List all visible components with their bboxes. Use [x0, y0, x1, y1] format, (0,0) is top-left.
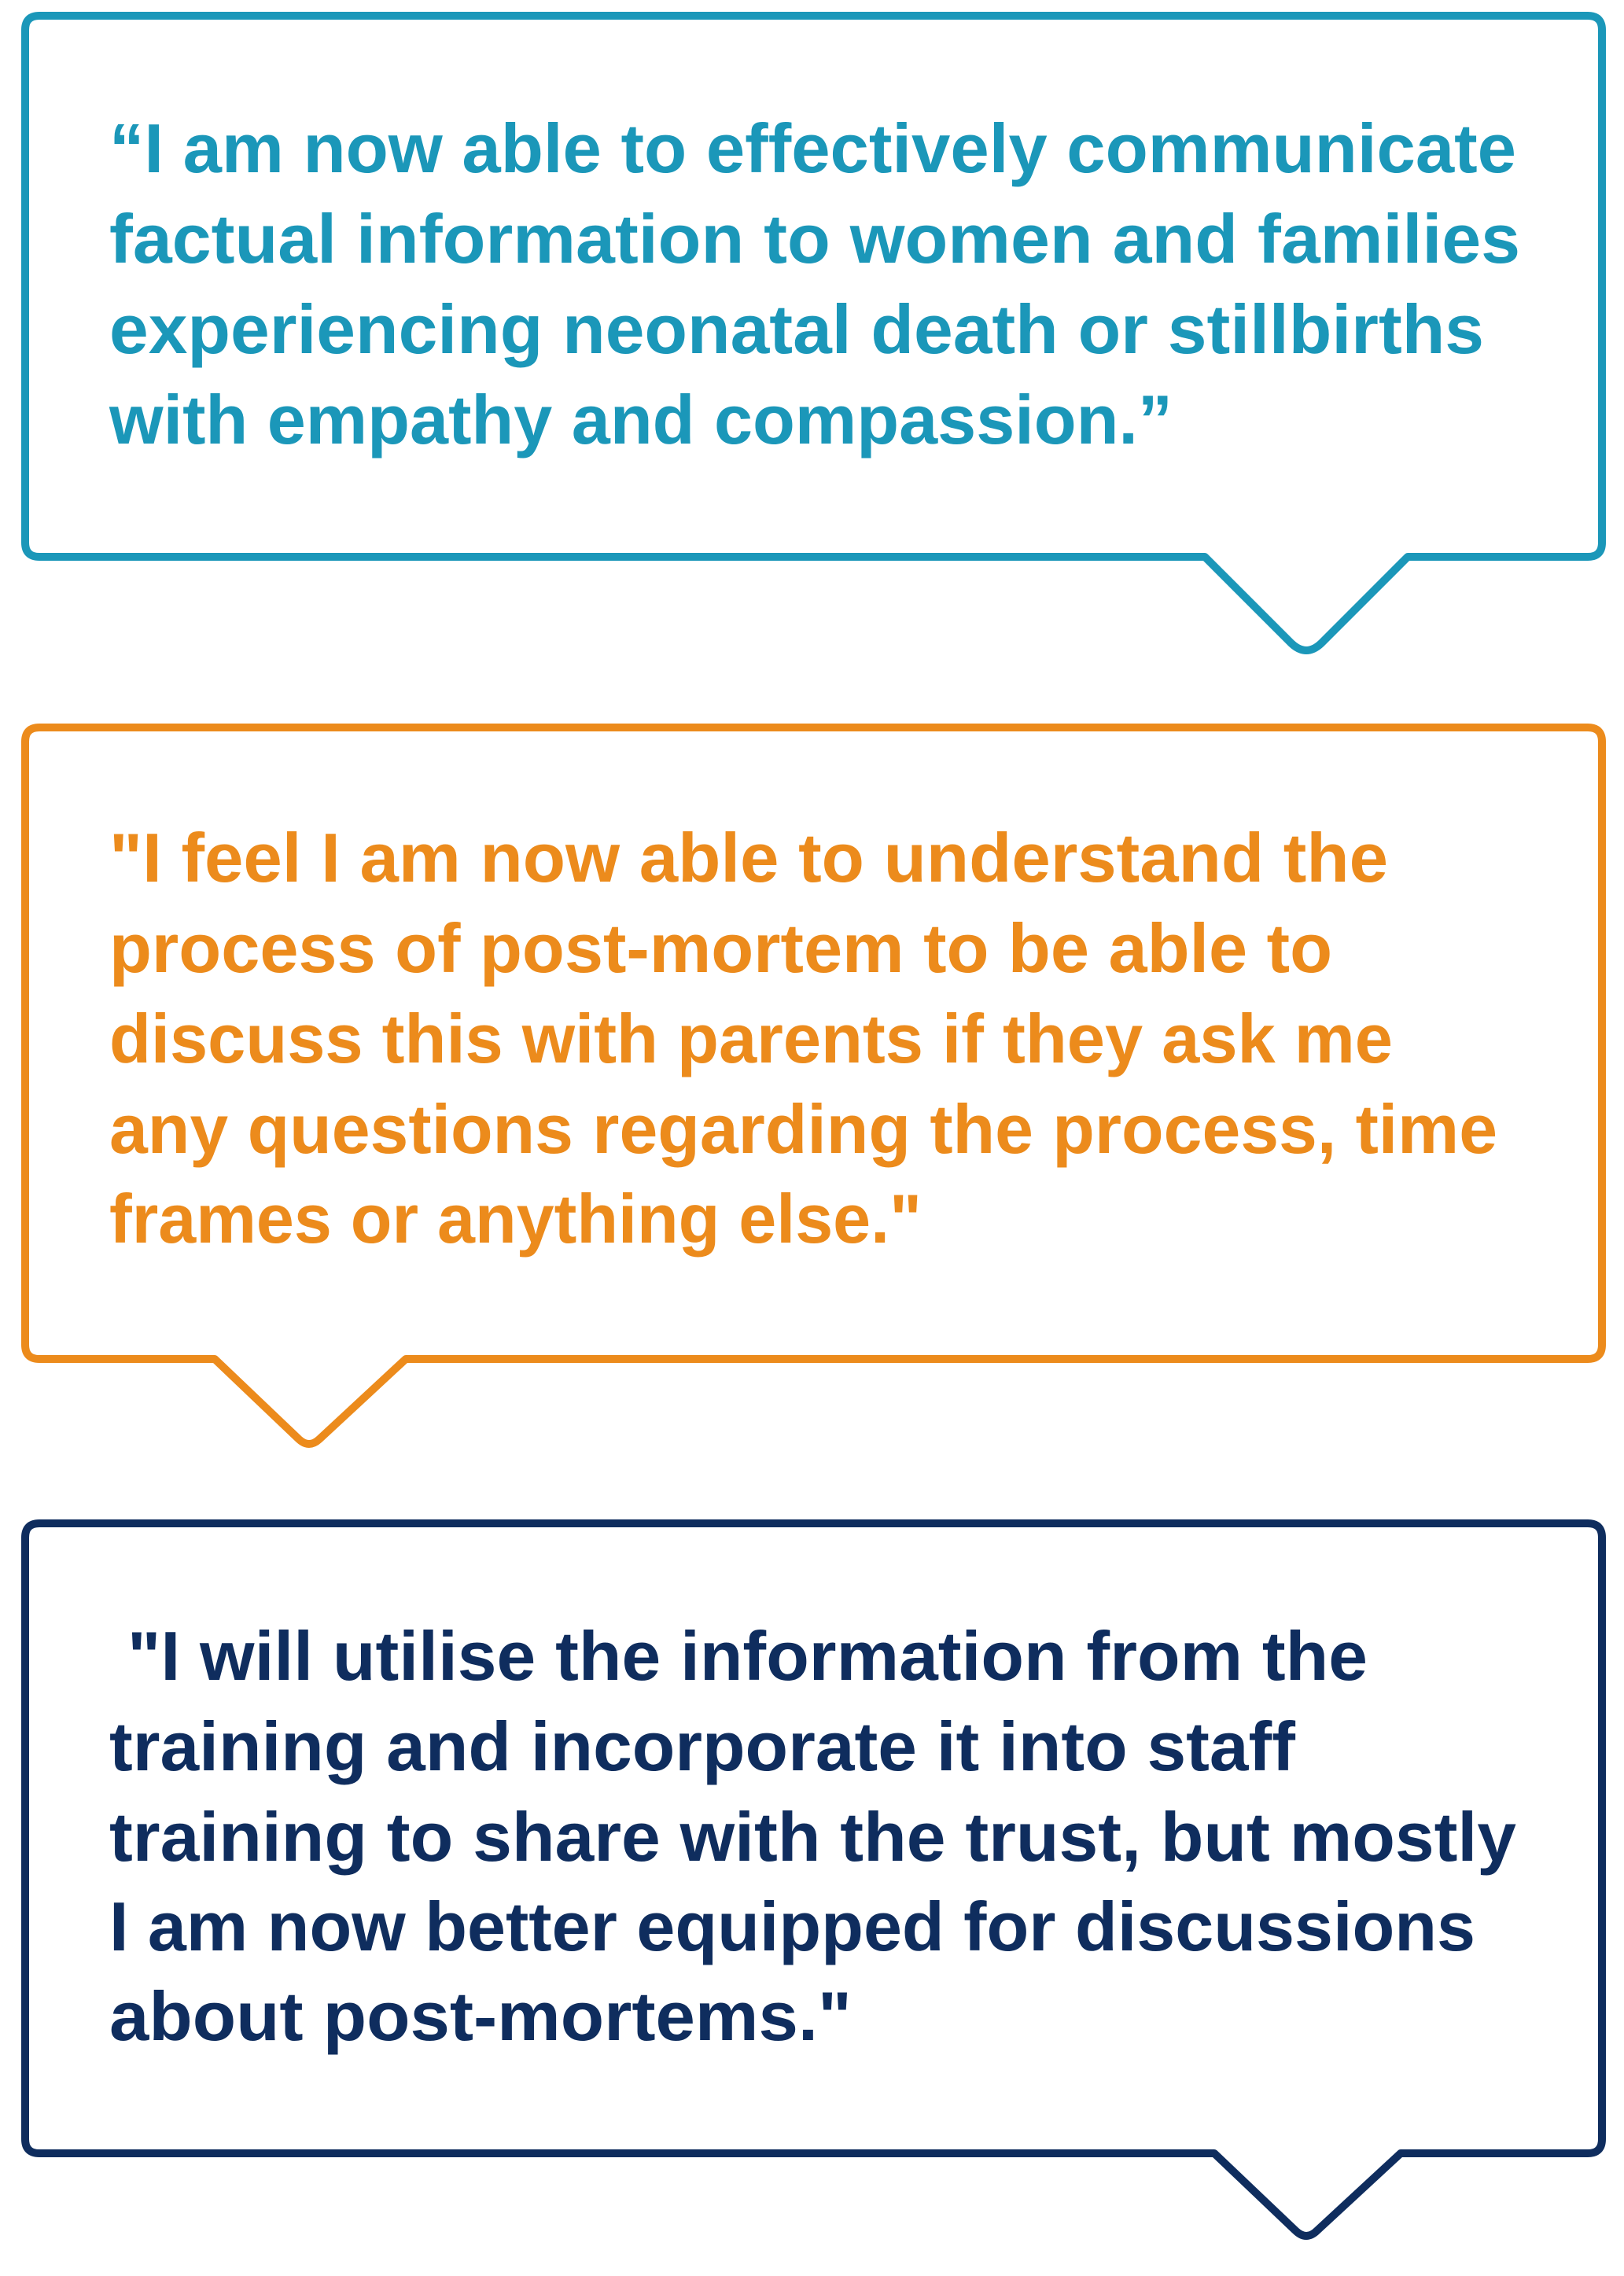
quote text 3: I am now better equipped for discussions: [109, 1887, 1475, 1965]
quote text 2: process of post-mortem to be able to: [109, 909, 1332, 987]
quote text 1: with empathy and compassion.”: [109, 381, 1173, 459]
quote text 3: [109, 1617, 1516, 2055]
quote text 2: frames or anything else.": [109, 1180, 922, 1258]
speech bubble 3: [25, 1523, 1602, 2236]
quote text 1: experiencing neonatal death or stillbirths: [109, 290, 1484, 368]
quote text 3: training to share with the trust, but mostly: [109, 1798, 1516, 1876]
quote text 2: "I feel I am now able to understand the: [109, 819, 1388, 897]
panel: quote 3: [25, 1523, 1602, 2236]
quote text 1: “I am now able to effectively communicate: [109, 109, 1516, 187]
quote text 2: any questions regarding the process, time: [109, 1090, 1497, 1168]
quote text 2: [109, 819, 1497, 1258]
quote text 1: [109, 109, 1520, 459]
panel: quote 1: [25, 16, 1602, 650]
speech bubble 2: [25, 727, 1602, 1444]
quote text 3: training and incorporate it into staff: [109, 1707, 1296, 1785]
speech bubble 1: [25, 16, 1602, 650]
quote text 2: discuss this with parents if they ask me: [109, 1000, 1393, 1077]
quote text 3: "I will utilise the information from the: [127, 1617, 1368, 1695]
quote text 1: factual information to women and families: [109, 200, 1520, 278]
panel: quote 2: [25, 727, 1602, 1444]
quote text 3: about post-mortems.": [109, 1977, 852, 2055]
